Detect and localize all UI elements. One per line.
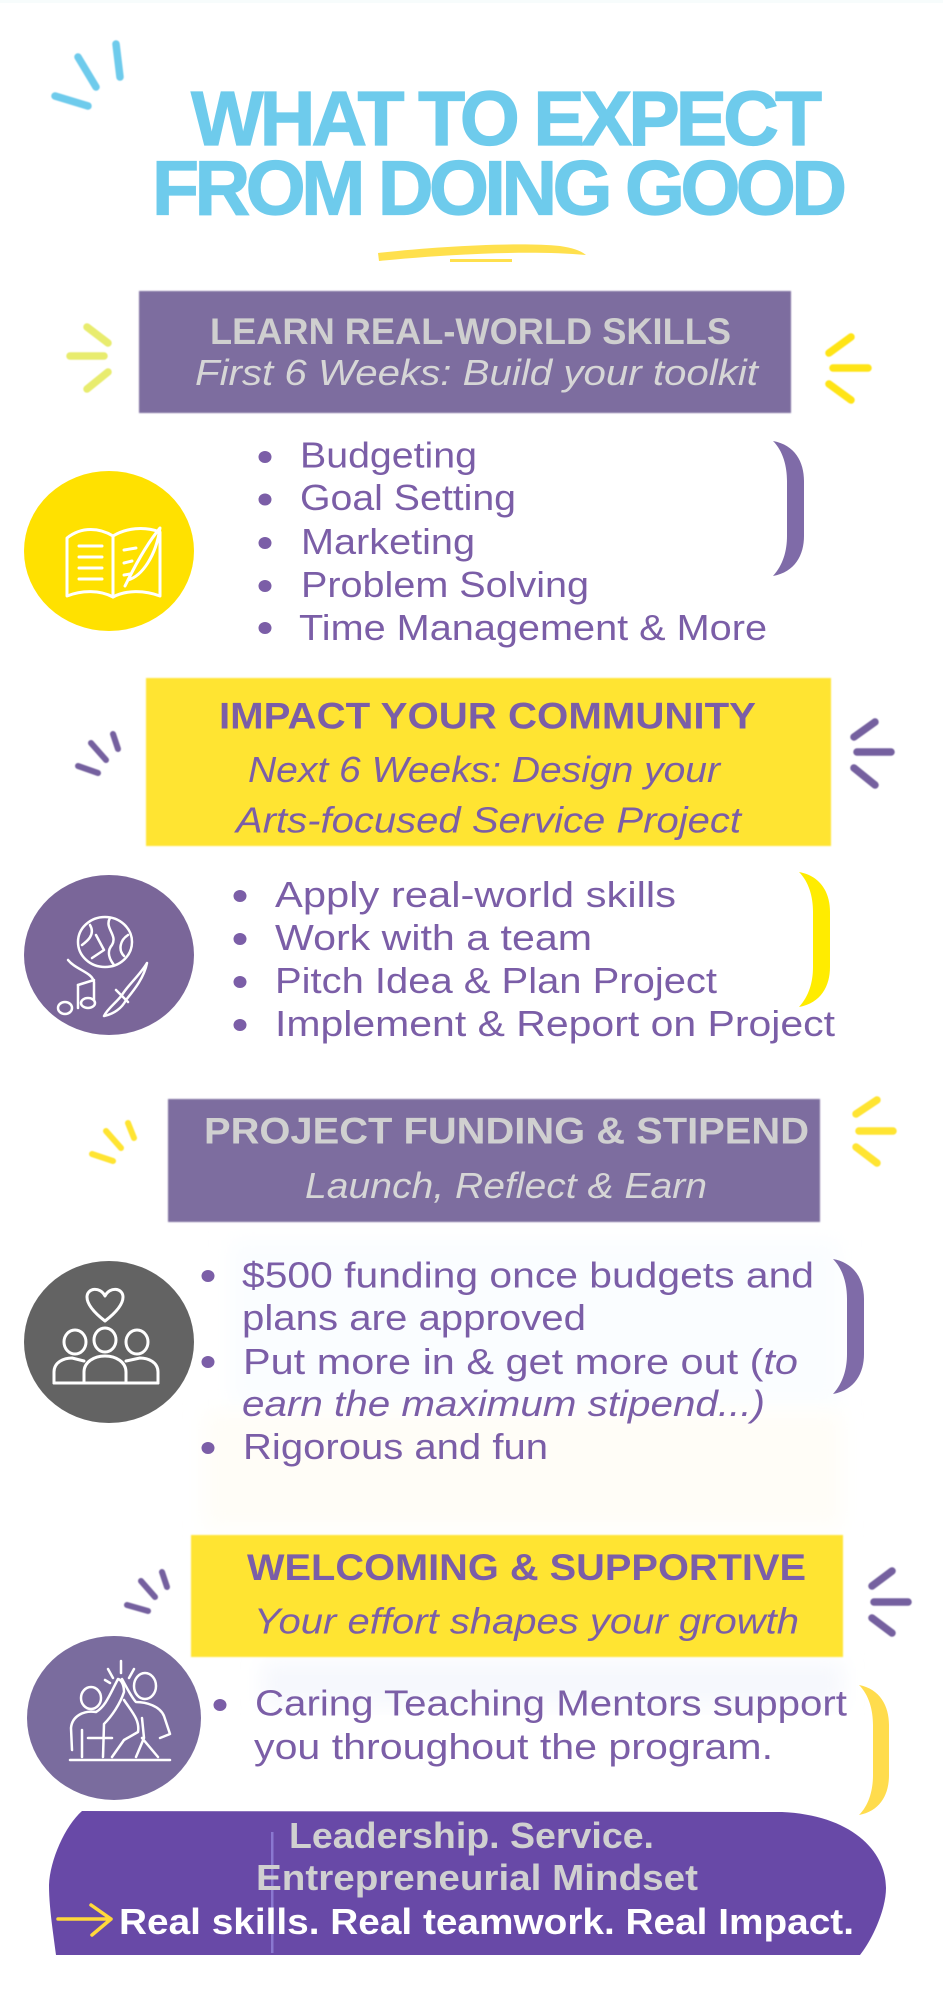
icon: book and quill	[24, 471, 194, 631]
icon: heart above three people	[24, 1261, 194, 1423]
banner text: Real skills. Real teamwork. Real Impact.	[119, 1901, 854, 1942]
bracket	[833, 1259, 864, 1394]
bullet list	[202, 1254, 814, 1467]
heading: WELCOMING & SUPPORTIVE	[247, 1547, 806, 1588]
left sparks	[78, 734, 118, 773]
band header	[146, 678, 831, 846]
heading: IMPACT YOUR COMMUNITY	[219, 696, 756, 736]
arrow	[58, 1905, 111, 1935]
bullet list: earn the maximum stipend...)	[242, 1383, 765, 1424]
bullet list: Implement & Report on Project	[275, 1003, 835, 1044]
icon: two people high five	[27, 1636, 201, 1800]
left sparks	[92, 1123, 134, 1161]
banner shape	[49, 1811, 886, 1955]
bullet list: Work with a team	[275, 917, 592, 958]
bullet list: Problem Solving	[301, 564, 589, 605]
right sparks	[872, 1571, 908, 1633]
panel: impact your community	[24, 678, 891, 1044]
banner text: Leadership. Service.	[289, 1815, 654, 1856]
bullet list: Goal Setting	[300, 477, 516, 518]
heading: LEARN REAL-WORLD SKILLS	[210, 311, 731, 352]
band header	[191, 1535, 843, 1657]
bullet list: Pitch Idea & Plan Project	[275, 960, 717, 1001]
bracket	[859, 1685, 889, 1815]
callout: closing banner	[49, 1811, 886, 1955]
panel: learn real-world skills	[24, 291, 868, 648]
subheading	[234, 749, 743, 840]
title underline	[378, 244, 586, 262]
subheading: Next 6 Weeks: Design your	[248, 749, 722, 790]
bullet list: you throughout the program.	[254, 1726, 773, 1767]
icon: globe, music note and paintbrush	[24, 875, 194, 1035]
subheading: Your effort shapes your growth	[254, 1600, 799, 1642]
band header	[168, 1099, 820, 1222]
panel: welcoming and supportive	[27, 1535, 908, 1815]
bullet list: plans are approved	[242, 1297, 586, 1338]
bullet list: Marketing	[301, 521, 475, 562]
bullet list: $500 funding once budgets and	[242, 1254, 814, 1296]
bullet list	[258, 434, 767, 648]
left sparks	[70, 327, 108, 389]
icon: blue title sparks	[55, 44, 120, 106]
bullet list	[214, 1682, 847, 1767]
bracket	[773, 441, 804, 576]
right sparks	[856, 1100, 893, 1163]
right sparks	[854, 722, 891, 785]
subheading: First 6 Weeks: Build your toolkit	[195, 352, 760, 393]
subheading: Arts-focused Service Project	[234, 800, 743, 840]
banner text	[119, 1815, 854, 1942]
panel: project funding and stipend	[24, 1099, 893, 1467]
heading: PROJECT FUNDING & STIPEND	[204, 1110, 809, 1152]
bullet list: Put more in & get more out ( to	[243, 1341, 798, 1382]
left sparks	[127, 1572, 167, 1611]
bullet list: Rigorous and fun	[243, 1426, 548, 1467]
title: WHAT TO EXPECT	[191, 76, 822, 162]
bullet list: Budgeting	[300, 434, 477, 476]
bracket	[799, 872, 830, 1007]
bullet list: Time Management & More	[299, 607, 767, 648]
title: FROM DOING GOOD	[152, 146, 847, 232]
bullet list: Apply real-world skills	[275, 874, 676, 915]
bullet list	[234, 874, 835, 1044]
band header	[139, 291, 791, 413]
subheading: Launch, Reflect & Earn	[305, 1165, 707, 1206]
banner text: Entrepreneurial Mindset	[256, 1857, 698, 1898]
title	[152, 76, 847, 232]
right sparks	[829, 337, 868, 400]
bullet list: Caring Teaching Mentors support	[255, 1682, 847, 1724]
